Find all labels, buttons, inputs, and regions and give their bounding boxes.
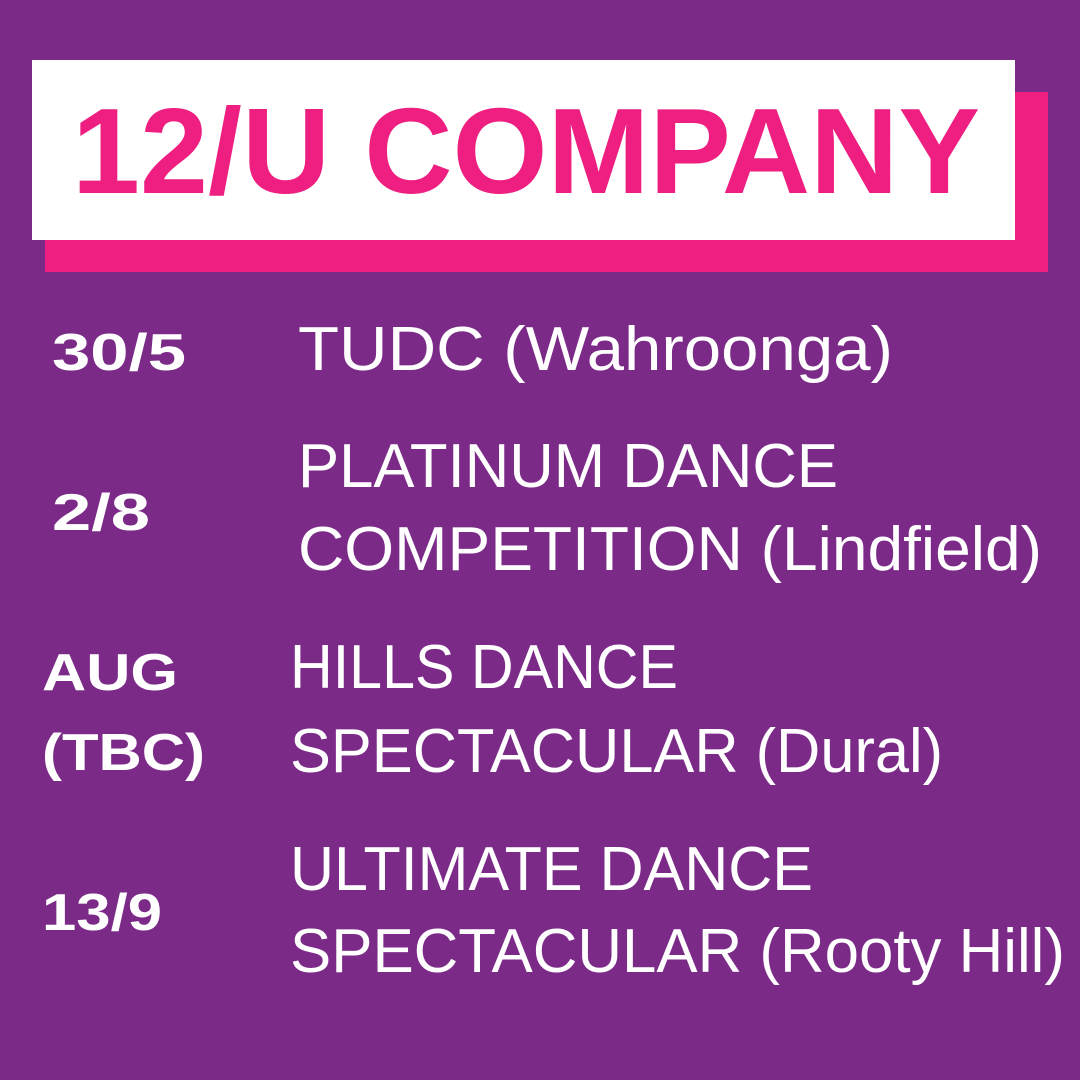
title block	[32, 60, 1048, 272]
row: 13/9: 13/9	[42, 884, 162, 942]
row: AUG (TBC): AUG	[42, 644, 178, 702]
row: 30/5: 30/5	[52, 324, 186, 382]
row: 13/9	[42, 835, 1065, 986]
row: 2/8: COMPETITION (Lindfield)	[298, 515, 1042, 584]
title shadow box	[45, 92, 1048, 272]
row: 2/8: 2/8	[52, 484, 150, 542]
row: 30/5: TUDC (Wahroonga)	[298, 315, 893, 384]
row: AUG (TBC)	[42, 633, 943, 786]
row: AUG (TBC): (TBC)	[42, 724, 205, 782]
row: 2/8: PLATINUM DANCE	[298, 432, 838, 501]
row: AUG (TBC): SPECTACULAR (Dural)	[290, 717, 943, 786]
title: 12/U COMPANY	[72, 83, 980, 219]
row: 2/8	[52, 432, 1042, 584]
row: 13/9: SPECTACULAR (Rooty Hill)	[290, 917, 1065, 986]
row: 30/5	[52, 315, 893, 384]
title white box	[32, 60, 1015, 240]
row: AUG (TBC): HILLS DANCE	[290, 633, 678, 702]
row: 13/9: ULTIMATE DANCE	[290, 835, 813, 904]
